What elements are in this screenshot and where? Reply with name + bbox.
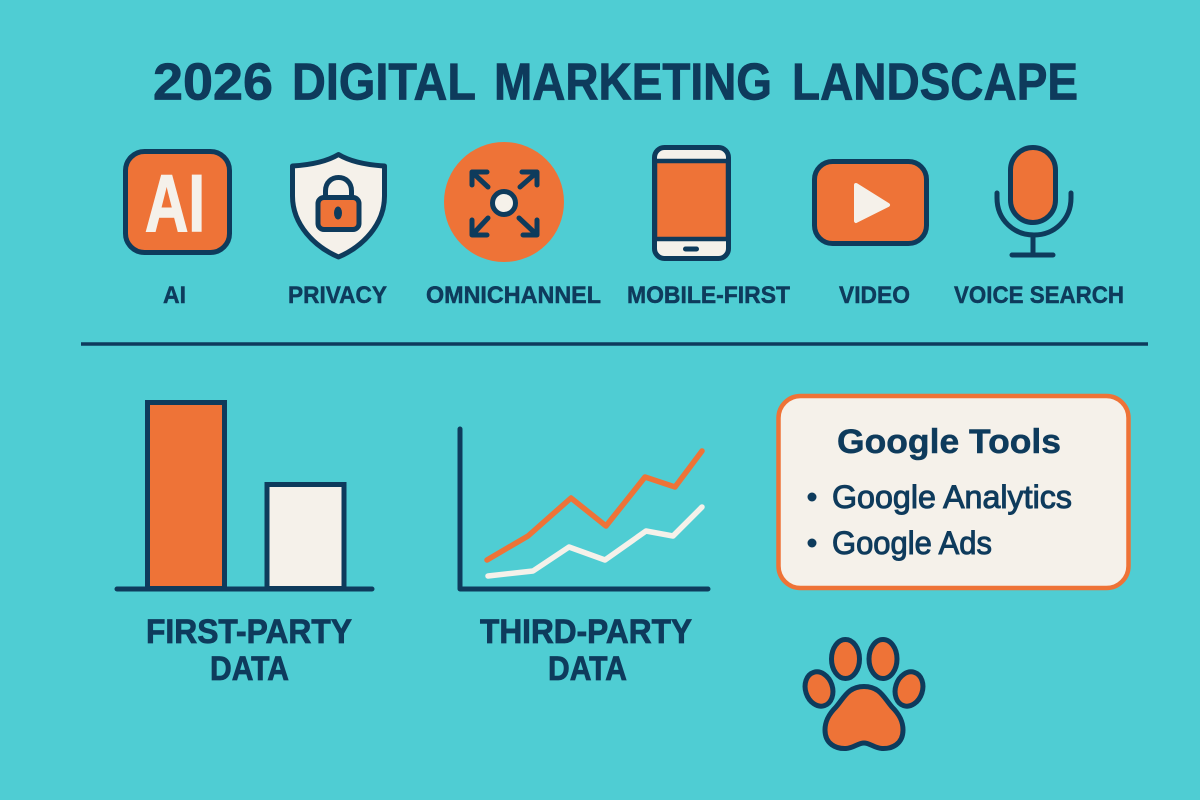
callout heading: Google Tools: [837, 423, 1061, 461]
bar chart: first-party data: [117, 402, 372, 589]
line chart: third-party data: [460, 429, 708, 589]
label: third-party data: THIRD-PARTY: [480, 613, 692, 651]
icon: privacy shield with padlock: [292, 154, 384, 257]
label: first-party data: FIRST-PARTY: [146, 613, 352, 651]
title: MARKETING: [494, 54, 772, 112]
label: voice search: VOICE SEARCH: [954, 282, 1124, 309]
title: DIGITAL: [292, 54, 476, 112]
icon: omnichannel hub: [444, 142, 564, 262]
icon: microphone: [997, 148, 1071, 255]
title: 2026: [153, 54, 273, 112]
icon: paw print: [801, 640, 927, 749]
title: LANDSCAPE: [792, 54, 1078, 112]
label: first-party data: [146, 613, 352, 688]
label: third-party data: DATA: [548, 650, 627, 688]
label: mobile-first: MOBILE-FIRST: [627, 282, 790, 309]
label: first-party data: DATA: [210, 650, 289, 688]
bullet list: [808, 479, 1072, 561]
label: AI: AI: [163, 282, 186, 309]
title: [153, 54, 1078, 112]
label: omnichannel: OMNICHANNEL: [426, 282, 601, 309]
bullet list: Google Ads: [832, 525, 992, 561]
icon: AI: [126, 152, 230, 252]
icon: AI: AI: [145, 159, 205, 249]
label: third-party data: [480, 613, 692, 688]
icon: mobile phone: [654, 148, 728, 258]
icon row: marketing trends: [126, 142, 1124, 309]
label: privacy: PRIVACY: [288, 282, 387, 309]
callout: Google Tools: [778, 396, 1128, 588]
label: video: VIDEO: [839, 282, 910, 309]
icon: video play: [814, 162, 926, 244]
bullet list: Google Analytics: [832, 479, 1072, 515]
